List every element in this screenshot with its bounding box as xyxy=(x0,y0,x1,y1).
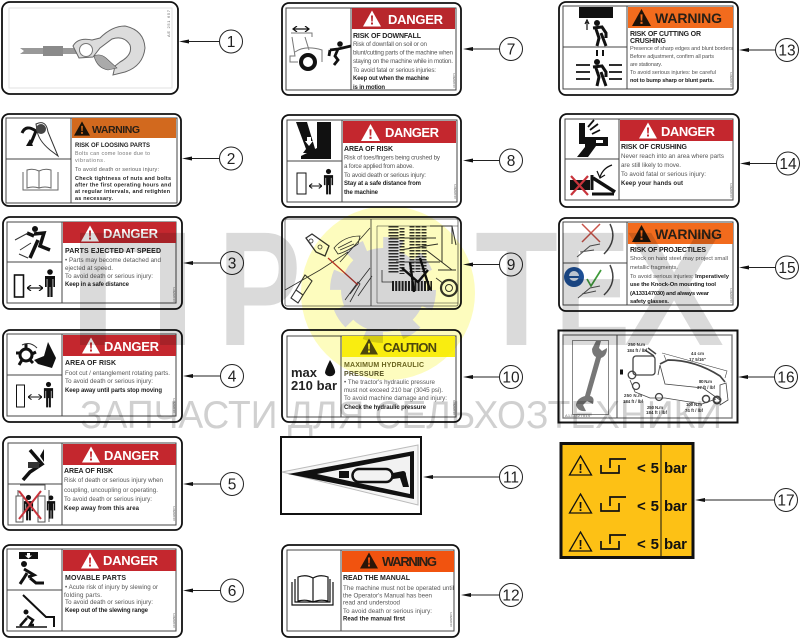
icon: machine drawing xyxy=(377,226,458,303)
callout 12 xyxy=(461,584,522,606)
text block: Keep away from this area xyxy=(64,506,140,512)
icon: manual book xyxy=(23,169,58,190)
label 9: machine diagram xyxy=(282,217,461,309)
callout 8: 8 xyxy=(507,153,515,170)
text block xyxy=(343,575,454,622)
label 16: torque diagram xyxy=(558,330,738,422)
text block: AREA OF RISK xyxy=(344,146,393,153)
text block: • Acute risk of injury by slewing or xyxy=(65,584,158,591)
callout 12: 12 xyxy=(502,588,520,604)
header: DANGER xyxy=(103,553,159,568)
torque values: 184 ft / lbf xyxy=(646,410,668,415)
text block: To avoid death or serious injury: xyxy=(64,496,152,503)
text block: CRUSHING xyxy=(630,38,667,45)
text block: coupling, uncoupling or operating. xyxy=(64,487,158,494)
icon: keep distance xyxy=(297,169,333,194)
icon: hook and cable xyxy=(20,26,145,75)
callout 15: 15 xyxy=(778,260,796,277)
icon: legs and boot xyxy=(296,122,331,159)
callout 2: 2 xyxy=(227,151,235,168)
callout 6: 6 xyxy=(228,583,236,600)
icon: manual book xyxy=(292,576,333,605)
row 3 xyxy=(570,532,687,553)
torque values: 184 ft / lbf xyxy=(627,348,648,353)
text block: Stay at a safe distance from xyxy=(344,181,421,187)
text block: Presence of sharp edges and blunt borders xyxy=(630,46,733,52)
label 3: danger parts ejected: A133825071 xyxy=(172,287,176,302)
label 14: danger risk of crushing: A133825071 xyxy=(729,183,733,198)
callout 2 xyxy=(182,147,242,170)
header xyxy=(63,550,176,571)
icon: hand with bolt xyxy=(22,123,58,156)
text block: To avoid death or serious injury: xyxy=(344,172,426,179)
row 1: < 5 xyxy=(637,460,659,477)
torque values: 250 N.m xyxy=(647,405,663,410)
label 12: warning read the manual xyxy=(282,545,459,637)
text block: Check tightness of nuts and bolts xyxy=(75,176,171,182)
callout 14: 14 xyxy=(779,156,797,173)
icon: wrench xyxy=(572,340,608,414)
label 7: danger risk of downfall: A133825071 xyxy=(452,73,456,88)
torque values: 250 N.m xyxy=(628,342,645,347)
text block: To avoid fatal or serious injuries: xyxy=(353,67,436,74)
text block xyxy=(65,360,170,394)
callout 9 xyxy=(463,253,522,276)
text block: Before adjustment, confirm all parts xyxy=(630,54,714,60)
callout 7: 7 xyxy=(507,42,515,58)
header xyxy=(628,223,733,244)
text block xyxy=(64,468,164,512)
row 1 xyxy=(570,456,687,477)
watermark brand name: Е xyxy=(555,197,630,380)
text block: a force applied from above. xyxy=(344,163,414,170)
callout 14 xyxy=(740,152,800,175)
callout 10: 10 xyxy=(502,370,520,386)
callout 5: 5 xyxy=(228,476,236,494)
row 3: bar xyxy=(664,536,687,553)
header: DANGER xyxy=(104,339,160,354)
text block: after the first operating hours and xyxy=(75,182,171,188)
icon: hitch detail xyxy=(285,228,372,303)
text block: (A133147030) and always wear xyxy=(630,291,710,297)
text block: not to bump sharp or blunt parts. xyxy=(630,78,714,84)
callout 16: 16 xyxy=(777,370,795,386)
callout 5 xyxy=(183,472,244,496)
text block: use the Knock-On mounting tool xyxy=(630,282,716,288)
max pressure text: max xyxy=(291,365,318,380)
text block: To avoid death or serious injury: xyxy=(65,273,153,280)
text block: is in motion xyxy=(353,85,385,91)
icon: rotating blade and foot xyxy=(16,342,56,368)
callout 4 xyxy=(183,364,244,388)
icon: running person xyxy=(15,226,50,258)
text block: PARTS EJECTED AT SPEED xyxy=(65,248,161,255)
text block: Bolts can come loose due to xyxy=(75,151,150,157)
text block xyxy=(344,146,441,196)
text block: staying on the machine while in motion. xyxy=(353,58,453,65)
header xyxy=(343,121,456,143)
text block: as necessary. xyxy=(75,196,114,202)
text block xyxy=(630,31,733,84)
header xyxy=(620,120,733,141)
header xyxy=(342,336,455,357)
text block: RISK OF PROJECTILES xyxy=(630,247,706,254)
text block: To avoid serious injuries: be careful xyxy=(630,70,716,76)
torque values: 250 N.m xyxy=(624,393,642,398)
icon: crushed hand xyxy=(577,120,608,157)
header: DANGER xyxy=(104,448,160,463)
header: DANGER xyxy=(661,124,716,139)
callout 13: 13 xyxy=(778,42,796,60)
text block: • The tractor's hydraulic pressure xyxy=(344,379,436,386)
text block: vibrations. xyxy=(75,158,105,164)
label 4: danger foot cut xyxy=(3,330,182,422)
callout 16 xyxy=(738,366,798,388)
row 2 xyxy=(570,494,687,515)
icon: tractor and falling person xyxy=(290,26,351,69)
text block: To avoid death or serious injury: xyxy=(65,599,153,606)
label 3: danger parts ejected xyxy=(3,217,182,309)
icon: accumulator xyxy=(339,469,409,487)
row 1: bar xyxy=(664,460,687,477)
text block: • Parts may become detached and xyxy=(65,257,162,264)
text block: Keep your hands out xyxy=(621,181,683,187)
label 8: danger toes xyxy=(282,115,461,207)
callout 3: 3 xyxy=(228,256,236,272)
label 13: warning cutting or crushing xyxy=(559,2,738,95)
text block: the Operator's Manual has been xyxy=(343,592,433,600)
text block: at regular intervals, and retighten xyxy=(75,189,170,195)
text block: RISK OF LOOSING PARTS xyxy=(75,143,150,149)
watermark brand name: П xyxy=(68,197,197,380)
callout 7 xyxy=(463,38,522,60)
max pressure text xyxy=(291,365,337,393)
text block: are stationary. xyxy=(630,62,662,68)
label 10: caution hydraulic pressure: A133825071 xyxy=(452,400,456,415)
text block: Keep in a safe distance xyxy=(65,282,130,288)
header xyxy=(63,444,176,465)
watermark brand name: Т xyxy=(475,197,558,380)
text block: Keep out of the slewing range xyxy=(65,608,149,614)
text block: Risk of toes/fingers being crushed by xyxy=(344,154,441,162)
icon: person between machine, red cross xyxy=(16,485,55,522)
row 3: < 5 xyxy=(637,536,659,553)
row 2: < 5 xyxy=(637,498,659,515)
header: CAUTION xyxy=(383,340,437,355)
callout 13 xyxy=(739,38,798,62)
text block: Check the hydraulic pressure xyxy=(344,405,427,411)
callout 9: 9 xyxy=(507,257,515,274)
header: DANGER xyxy=(103,226,159,241)
label 15: warning projectiles xyxy=(559,218,738,311)
row 2: ! xyxy=(578,499,583,514)
text block: must not exceed 210 bar (3045 psi). xyxy=(344,387,443,394)
callout 1 xyxy=(179,30,242,53)
label 4: danger foot cut: A133825071 xyxy=(172,398,176,413)
callout 17 xyxy=(695,488,798,512)
icon: slewing arm xyxy=(16,595,54,627)
callout 11 xyxy=(423,466,522,488)
icon: oil drop xyxy=(325,360,335,376)
label 8: danger toes: A133825071 xyxy=(453,184,457,199)
text block: Foot cut / entanglement rotating parts. xyxy=(65,370,170,377)
icon: falling load on person xyxy=(19,552,44,584)
text block xyxy=(75,143,171,202)
header: WARNING xyxy=(382,554,437,569)
label 17: yellow pressure plate xyxy=(561,444,693,558)
icon: correct tool with glasses xyxy=(564,265,613,298)
text block: To avoid death or serious injury: xyxy=(75,167,159,173)
row 2: bar xyxy=(664,498,687,515)
text block: To avoid death or serious injury: xyxy=(65,378,153,385)
text block: Shock on hard steel may project small xyxy=(630,256,728,262)
text block xyxy=(344,362,447,411)
icon: keep distance xyxy=(16,382,53,407)
watermark tagline: ЗАПЧАСТИ ДЛЯ СЕЛЬХОЗТЕХНИКИ xyxy=(80,394,722,437)
label 2: warning loosing parts xyxy=(2,114,181,206)
text block: RISK OF CRUSHING xyxy=(621,144,688,151)
text block: MAXIMUM HYDRAULIC xyxy=(344,362,424,369)
header: WARNING xyxy=(655,226,722,242)
header xyxy=(352,8,455,29)
icon: crushed body xyxy=(23,449,44,480)
text block: READ THE MANUAL xyxy=(343,575,411,582)
callout 11: 11 xyxy=(503,470,519,486)
text block: To avoid death or serious injury: xyxy=(343,608,432,615)
text block xyxy=(353,33,454,91)
callout 3 xyxy=(183,252,244,274)
text block: ejected at speed. xyxy=(65,265,113,272)
text block: AREA OF RISK xyxy=(64,468,113,475)
text block: To avoid serious injuries: Imperatively xyxy=(630,274,730,280)
watermark xyxy=(68,197,724,437)
icon: keep distance xyxy=(14,269,55,297)
text block: folding parts. xyxy=(64,592,102,599)
text block: To avoid fatal or serious injury: xyxy=(621,171,706,178)
header xyxy=(63,222,176,243)
header xyxy=(63,335,176,356)
text block xyxy=(65,248,162,288)
watermark emblem: yellow disc and gear xyxy=(301,206,475,380)
header: DANGER xyxy=(385,125,440,140)
torque values: 44 cm xyxy=(691,351,704,356)
torque values: 74 ft / lbf xyxy=(685,408,704,413)
torque values: 80 N.m xyxy=(699,379,712,384)
text block: the machine xyxy=(344,190,379,196)
watermark brand name xyxy=(68,197,724,380)
text block: RISK OF DOWNFALL xyxy=(353,33,422,40)
label 10: caution hydraulic pressure xyxy=(282,330,461,422)
label 6: danger movable parts xyxy=(3,545,182,637)
torque values: 184 ft / lbf xyxy=(623,399,644,404)
callout 15 xyxy=(739,256,798,279)
callout 8 xyxy=(463,149,522,172)
label 7: danger risk of downfall xyxy=(282,3,461,95)
text block xyxy=(64,575,158,614)
max pressure text: 210 bar xyxy=(291,378,337,393)
text block: Risk of death or serious injury when xyxy=(64,477,164,484)
text block: AREA OF RISK xyxy=(65,360,116,367)
text block: Never reach into an area where parts xyxy=(621,153,724,160)
torque values: 37 ft / lbf xyxy=(697,385,716,390)
label 14: danger risk of crushing xyxy=(560,114,739,207)
torque values: 100 N.m xyxy=(686,402,702,407)
text block: Read the manual first xyxy=(343,616,405,622)
text block xyxy=(621,144,724,187)
text block: Keep away until parts stop moving xyxy=(65,388,162,394)
label 12: warning read the manual: A133825071 xyxy=(449,612,453,627)
icon: forbidden tool xyxy=(577,224,613,257)
icon: person between bars xyxy=(576,50,622,86)
text block: Keep out when the machine xyxy=(353,76,430,82)
label 1: hook xyxy=(2,2,178,94)
callout 17: 17 xyxy=(777,492,795,510)
label 13: warning cutting or crushing: A133825071 xyxy=(729,72,733,87)
text block: RISK OF CUTTING OR xyxy=(630,31,701,38)
text block: To avoid machine damage and injury: xyxy=(344,395,447,402)
text block xyxy=(630,247,730,305)
label 11: pressure accumulator triangle xyxy=(281,437,421,514)
text block: The machine must not be operated until xyxy=(343,585,454,592)
callout 1: 1 xyxy=(227,34,235,51)
header: DANGER xyxy=(388,12,444,27)
header: WARNING xyxy=(92,124,140,136)
text block: read and understood xyxy=(343,600,401,606)
label 5: danger coupling xyxy=(3,437,182,530)
callout 4: 4 xyxy=(228,368,237,386)
label 6: danger movable parts: A133825071 xyxy=(172,613,176,628)
text block: blunt/cutting parts of the machine when xyxy=(353,50,454,56)
text block: safety glasses. xyxy=(630,299,669,305)
row 1: ! xyxy=(578,461,583,476)
header xyxy=(628,7,733,28)
torque values xyxy=(623,342,716,415)
text block: metallic fragments. xyxy=(630,265,678,271)
icon: person under load xyxy=(579,7,613,46)
header xyxy=(342,551,454,572)
header xyxy=(72,118,176,138)
row 3: ! xyxy=(578,537,583,552)
part code: A133827514 xyxy=(565,413,591,418)
icon: no hands, closing parts xyxy=(570,165,615,195)
label 5: danger coupling: A133825071 xyxy=(172,506,176,521)
text block: MOVABLE PARTS xyxy=(65,575,126,582)
label 15: warning projectiles: A133825071 xyxy=(729,288,733,303)
header: WARNING xyxy=(655,10,722,26)
text block: are still likely to move. xyxy=(621,162,681,169)
diagram: linkage xyxy=(620,348,728,405)
torque values: 17 5/16" xyxy=(689,357,706,362)
text block: Risk of downfall on soil or on xyxy=(353,41,428,48)
watermark brand name: Х xyxy=(624,197,724,380)
part code: AE 251 657 xyxy=(166,9,171,37)
callout 6 xyxy=(183,579,244,602)
text block: PRESSURE xyxy=(344,371,384,378)
watermark brand name: Р xyxy=(218,197,301,380)
callout 10 xyxy=(463,366,522,388)
